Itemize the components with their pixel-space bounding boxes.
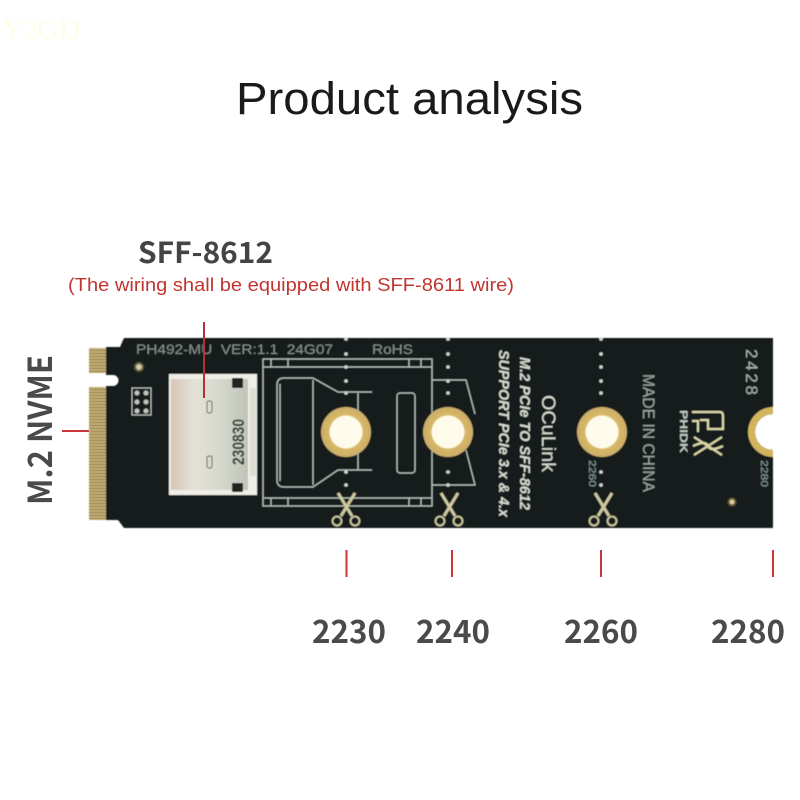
connector stamp: 230830 <box>229 419 248 465</box>
scissors 2240 <box>436 493 462 526</box>
pointer: SFF-8612 <box>203 322 205 398</box>
pointer: 2280 <box>772 550 774 577</box>
small label 2260: 2260 <box>586 460 598 487</box>
mounting hole 2240 <box>423 407 473 457</box>
board text: support: SUPPORT PCIe 3.x & 4.x <box>495 350 512 518</box>
PHIDK logo: PHIDK <box>677 410 689 453</box>
pointer: 2240 <box>451 550 453 577</box>
length label 2260: 2260 <box>564 607 638 653</box>
via <box>135 363 143 371</box>
title: Product analysis <box>236 73 583 124</box>
length label 2240: 2240 <box>416 607 490 653</box>
RoHS mark: RoHS <box>372 341 413 357</box>
board text: made in China: MADE IN CHINA <box>639 374 658 493</box>
PHIDK logo <box>677 410 723 455</box>
note: wiring requirement: (The wiring shall be equipped with SFF-8611 wire) <box>68 274 514 295</box>
cut marks <box>344 337 603 487</box>
board text: OCuLink: OCuLink <box>537 395 558 473</box>
label: M.2 NVME: M.2 NVME <box>14 355 62 505</box>
via near 2280 <box>728 498 736 506</box>
length label 2280: 2280 <box>711 607 785 653</box>
board silkscreen top line: PH492-MU VER:1.1 24G07 <box>136 341 333 357</box>
scissors icons <box>332 493 616 526</box>
pointer: 2230 <box>346 550 348 577</box>
scissors 2260 <box>590 493 616 526</box>
gold edge contacts <box>89 348 106 520</box>
mounting hole 2230 <box>321 407 371 457</box>
scissors 2230 <box>332 493 360 526</box>
heading: SFF-8612: SFF-8612 <box>138 230 273 272</box>
circuit board <box>89 337 773 528</box>
mounting outline 2240 <box>432 380 475 485</box>
board text: M.2 PCIe to SFF-8612: M.2 PCIe TO SFF-8612 <box>516 357 533 511</box>
small component pads <box>132 388 151 415</box>
small label 2280: 2280 <box>758 460 770 487</box>
mounting half hole 2280 <box>748 407 773 457</box>
pointer: M.2 NVME <box>62 430 89 432</box>
pointer: 2260 <box>600 550 602 577</box>
mounting outline 2230 <box>263 359 432 506</box>
length label 2230: 2230 <box>312 607 386 653</box>
small mark top right: 2428 <box>742 349 761 395</box>
SFF-8612 metal connector <box>169 374 257 495</box>
mounting hole 2260 <box>577 407 627 457</box>
watermark: Y2GD <box>2 15 80 46</box>
board body <box>106 338 773 528</box>
